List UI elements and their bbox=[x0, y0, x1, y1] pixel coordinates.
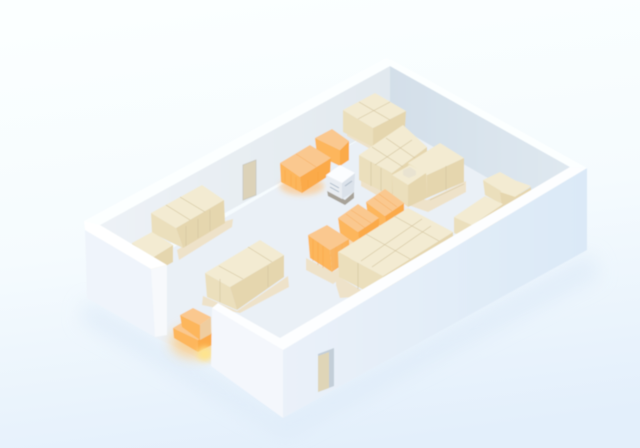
left wall top bbox=[84, 221, 167, 269]
lower box bbox=[173, 328, 198, 352]
orange crate 1 on pallet bbox=[306, 225, 352, 284]
door: back wall bbox=[243, 160, 256, 200]
orange crates: back pair bbox=[280, 145, 331, 193]
glow: back crates bbox=[280, 177, 324, 195]
parcel bbox=[403, 167, 416, 178]
small box with parcel bbox=[392, 165, 427, 207]
small orange boxes in doorway bbox=[173, 308, 212, 352]
orange glow: doorway bbox=[171, 326, 219, 358]
door: front wall bbox=[318, 348, 334, 392]
back-right wall top bbox=[386, 58, 587, 168]
center box cluster bbox=[359, 125, 427, 204]
left wall outer face bbox=[85, 230, 155, 337]
large flat box stack bbox=[336, 208, 453, 300]
glow: front crates bbox=[340, 205, 404, 250]
tall box on pallet bbox=[408, 143, 466, 212]
back-left wall top bbox=[84, 58, 390, 225]
robot forklift bbox=[326, 165, 355, 205]
front wall top band bbox=[212, 167, 587, 350]
front-left wall bbox=[211, 308, 283, 418]
pallet bbox=[408, 181, 466, 212]
robot base bbox=[327, 190, 354, 205]
left low box bbox=[132, 232, 173, 272]
left front wall bbox=[84, 221, 167, 337]
right wall-side box bbox=[454, 196, 503, 240]
back-right wall bbox=[386, 58, 587, 225]
pallet bbox=[202, 276, 289, 313]
pallet stack: back corner bbox=[343, 93, 406, 150]
pallet bbox=[336, 275, 366, 298]
ground shadow bbox=[80, 254, 600, 435]
left wall end face bbox=[151, 265, 167, 337]
orange crate 3 bbox=[366, 189, 404, 230]
yellow glow bbox=[197, 347, 213, 361]
upper box bbox=[180, 315, 200, 340]
pallet bbox=[306, 258, 352, 284]
front-right wall outer face bbox=[283, 168, 587, 418]
pallet bbox=[177, 219, 233, 260]
orange crate 2 bbox=[338, 204, 379, 247]
front mid pallet stack bbox=[202, 240, 289, 313]
robot body bbox=[326, 175, 342, 199]
left pallet stack bbox=[151, 185, 233, 260]
back-left wall bbox=[84, 58, 390, 282]
warehouse floor bbox=[100, 122, 570, 400]
warehouse scene bbox=[84, 58, 587, 418]
orange crate: back bbox=[315, 129, 349, 166]
right corner boxes bbox=[483, 172, 531, 207]
